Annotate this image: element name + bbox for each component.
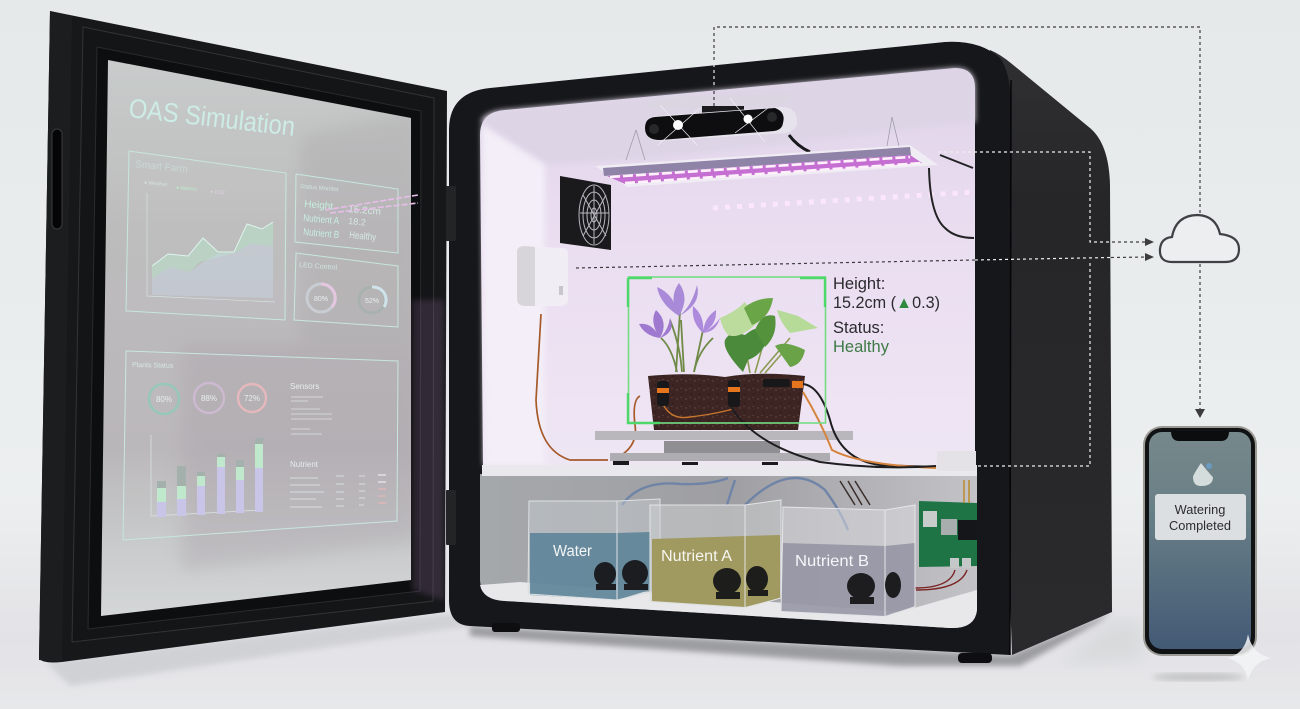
- connector: camera to phone: [714, 27, 1200, 415]
- notification card: Watering: [1175, 502, 1225, 517]
- light cable: [929, 155, 974, 238]
- door handle slot: [52, 129, 62, 229]
- camera: [645, 94, 810, 152]
- phone: [1143, 426, 1257, 681]
- panel: smart farm chart: [126, 151, 286, 320]
- phone-side floor shade: [1060, 620, 1142, 665]
- bar chart: [151, 435, 263, 517]
- panel: smart farm chart: ● CO2: [210, 189, 225, 196]
- purple frame tint: [412, 300, 444, 600]
- panel: LED control: 80%: [314, 296, 328, 303]
- shelf controller box: [937, 451, 976, 471]
- lower compartment: [480, 474, 977, 628]
- panel: status monitor: Nutrient B: [303, 227, 340, 241]
- pumps: [713, 566, 768, 599]
- panel: smart farm chart: ● Matrics: [176, 185, 197, 193]
- raspberry pi board: [915, 480, 977, 590]
- door: [39, 11, 447, 662]
- door floor shadow: [45, 614, 500, 686]
- icon: sparkle: [1227, 634, 1271, 681]
- scale platform: [595, 431, 853, 465]
- tank: water: Water: [553, 543, 592, 560]
- notification card: Completed: [1169, 518, 1231, 533]
- connector: hub to cloud: [576, 257, 1148, 268]
- detection box: [628, 277, 826, 423]
- cabinet: [446, 42, 1112, 663]
- panel: status monitor: Healthy: [349, 230, 377, 243]
- panel: plant health statistics: Nutrient: [290, 460, 319, 469]
- panel: smart farm chart: ● Weather: [144, 180, 168, 188]
- panel: status monitor: Nutrient A: [303, 213, 340, 227]
- panel: status monitor: Height: [304, 199, 334, 213]
- tank: water: [528, 499, 660, 600]
- panel: status monitor: 18.2: [348, 216, 366, 228]
- arrowhead: hub to cloud: [1145, 253, 1154, 261]
- dashboard title: OAS Simulation: [127, 93, 297, 142]
- wall LED reflection: [713, 192, 975, 208]
- panel: plant health statistics: 88%: [201, 394, 217, 403]
- door hinges: [446, 186, 456, 545]
- pumps: [847, 572, 901, 604]
- plant readout: Status:: [833, 319, 884, 337]
- planter: [648, 374, 805, 430]
- panel: LED control: LED Control: [299, 262, 338, 272]
- crocus plant: [639, 283, 720, 372]
- panel: plant health statistics: 80%: [156, 395, 172, 404]
- panel: plant health statistics: Plants Status: [132, 362, 174, 370]
- cabinet front shell: [449, 42, 1011, 655]
- tank: nutrient A: [650, 500, 781, 608]
- fan: [560, 176, 611, 250]
- tank: nutrient A: Nutrient A: [661, 548, 733, 565]
- plant readout: [833, 275, 940, 356]
- panel: status monitor: 15.2cm: [348, 204, 381, 218]
- grow light: [595, 117, 938, 187]
- door frame: [39, 11, 447, 662]
- panel: plant health statistics: 72%: [244, 394, 260, 403]
- icon: water drop: [1193, 463, 1213, 486]
- plant readout: 15.2cm (▲0.3): [833, 294, 940, 312]
- connector: shelf box to cloud line: [978, 262, 1090, 466]
- connector: grow light to cloud: [938, 152, 1148, 242]
- tubing and wires: [622, 478, 848, 530]
- icon: cloud: [1160, 215, 1239, 262]
- grow chamber: [480, 68, 975, 465]
- panel: smart farm chart: Smart Farm: [135, 159, 188, 176]
- plant readout: Height:: [833, 275, 885, 293]
- cabinet side: [990, 50, 1112, 655]
- leafy plant: [720, 298, 818, 373]
- pumps: [594, 560, 648, 590]
- panel: status monitor: Status Monitor: [300, 184, 339, 193]
- arrowhead: to phone: [1195, 409, 1205, 418]
- panel: status monitor: [295, 174, 418, 253]
- cabinet floor shadow: [470, 612, 1112, 666]
- soil sensors: [657, 379, 803, 407]
- chamber left wall: [482, 125, 545, 465]
- arrowhead: light to cloud: [1145, 238, 1154, 246]
- panel: LED control: [294, 253, 398, 327]
- tank: nutrient B: Nutrient B: [795, 553, 869, 570]
- notification card: [1155, 494, 1246, 540]
- sensor hub box: [517, 246, 568, 306]
- sensor cables to shelf box: [803, 384, 936, 467]
- phone shadow: [1152, 673, 1244, 681]
- panel: plant health statistics: [123, 351, 398, 540]
- tank: nutrient B: [781, 505, 915, 617]
- door glass: [101, 60, 411, 616]
- sensor cable: [536, 314, 640, 460]
- chamber ceiling: [481, 68, 975, 165]
- plant readout: Healthy: [833, 338, 890, 356]
- panel: LED control: 52%: [365, 298, 379, 305]
- cabinet feet: [492, 623, 992, 663]
- panel: plant health statistics: Sensors: [290, 382, 319, 391]
- shelf: [482, 465, 977, 476]
